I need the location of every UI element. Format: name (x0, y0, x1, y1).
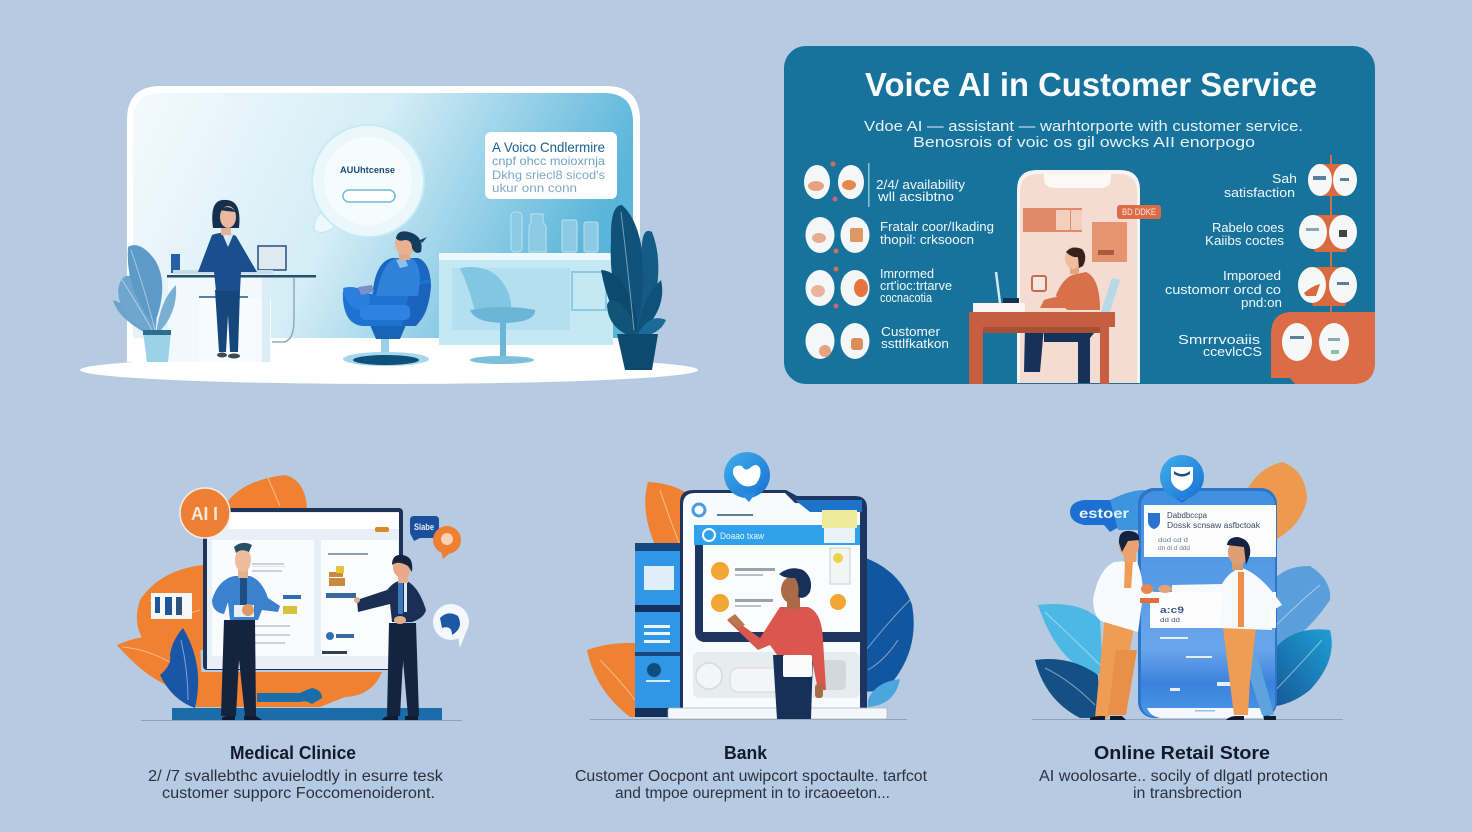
callout: voice assistant text: A Voico Cndlermire (492, 139, 605, 155)
orange tag (1117, 205, 1161, 219)
agent (1040, 247, 1100, 310)
benefit 7 label: Imporoed (1223, 269, 1281, 283)
benefit 2 label: Fratalr coor/Ikading (880, 220, 994, 234)
top card: dn di d ddd (1158, 546, 1190, 552)
benefit 3 label (880, 267, 952, 305)
tablet top logo (693, 504, 705, 516)
small data card (151, 593, 192, 619)
benefit 1 label (868, 163, 966, 207)
middle card: dd dd (1160, 618, 1180, 624)
benefits list: left icons and labels (804, 162, 994, 359)
phone banner (1023, 208, 1082, 232)
phone card (1092, 222, 1127, 262)
phone notch (1044, 173, 1111, 188)
light blue chair (460, 267, 535, 364)
room back wall (133, 93, 633, 345)
panel: Medical Clinic scene (117, 475, 469, 802)
smartphone (1138, 488, 1277, 718)
woman at kiosk (727, 568, 826, 719)
wooden desk (969, 312, 1115, 384)
chat bubbles (410, 516, 469, 648)
benefit 1 label: 2/4/ availability (876, 178, 966, 192)
man in navy suit (354, 555, 426, 720)
speech bubble: assistant (312, 125, 424, 237)
orange leaves (117, 475, 382, 707)
benefit 5 label (1224, 172, 1297, 200)
ground line (141, 720, 462, 721)
orange leaves (587, 482, 685, 717)
panel: Online Retail Store scene (1032, 455, 1343, 802)
benefits list: right icons and labels (1165, 155, 1375, 384)
middle card (1150, 592, 1276, 628)
benefit 6 icons (1299, 215, 1357, 252)
monitor (203, 508, 403, 670)
agent chair (1100, 278, 1120, 318)
ground line (590, 719, 907, 720)
room frame (127, 86, 640, 362)
benefit 6 label: Rabelo coes (1212, 221, 1284, 235)
benefit 1 label: wll acsibtno (877, 190, 954, 204)
orange corner block (1271, 312, 1375, 384)
benefit 2 icons (806, 217, 870, 254)
blue armchair (343, 258, 431, 366)
benefit 3 label: Imrormed (880, 267, 934, 281)
benefit 7 label (1165, 269, 1282, 310)
standing agent (198, 200, 257, 358)
chat bubbles: Slabe (414, 522, 434, 532)
heading: Bank: Bank (724, 742, 768, 763)
benefit 1 icons (804, 162, 864, 202)
shield pin icon (1160, 455, 1204, 503)
middle card: a:c9 (1160, 605, 1184, 615)
screen (695, 545, 865, 642)
panel: reception scene illustration (80, 86, 698, 384)
laptop (973, 272, 1046, 312)
benefit 6 label: Kaiibs coctes (1205, 234, 1284, 248)
phone with agent at desk (969, 170, 1161, 384)
benefit 3 icons (806, 266, 870, 308)
man left (1090, 531, 1159, 720)
bottom bar (1147, 708, 1263, 718)
benefit 3 label: cocnacotia (880, 291, 932, 305)
description: and tmpoe ourepment in to ircaoeeton... (615, 785, 890, 802)
benefit 6 label (1205, 221, 1284, 248)
bubble icon (724, 452, 770, 502)
benefit 5 icons (1308, 164, 1357, 196)
benefit 4 icons (806, 323, 870, 359)
reception desk (167, 246, 316, 362)
back shelf bottles (511, 212, 598, 252)
benefit 3 label: crt'ioc:trtarve (880, 279, 952, 293)
description (148, 768, 443, 802)
blue leaf (160, 628, 198, 708)
ground line (1032, 719, 1343, 720)
subtitle: Vdoe AI — assistant — warhtorporte with customer service. (864, 118, 1303, 135)
panel: Bank scene (575, 452, 928, 802)
sticky note (822, 510, 857, 543)
benefit 2 label: thopil: crksoocn (880, 233, 974, 247)
side device stack (635, 543, 680, 717)
base (668, 708, 887, 719)
benefit 8 icons (1282, 323, 1349, 361)
speech bubble: store (1070, 490, 1145, 532)
description (575, 768, 928, 802)
blue header bar (694, 525, 860, 545)
panel: Voice AI in Customer Service (784, 46, 1375, 384)
lower control panel (693, 652, 860, 698)
connector line (1330, 155, 1332, 335)
floor ellipse (80, 356, 698, 384)
background leaves (1035, 462, 1332, 718)
base gadget (257, 688, 322, 704)
subtitle (864, 118, 1303, 151)
top card: Dossk scnsaw asfbctoak (1167, 521, 1261, 530)
description (1039, 768, 1328, 802)
callout: voice assistant text: Dkhg sriecl8 sicod's (492, 168, 605, 182)
benefit 4 label: ssttlfkatkon (881, 337, 949, 351)
benefit 7 icons (1298, 267, 1357, 306)
floor strip (133, 338, 633, 366)
description: AI woolosarte.. socily of dlgatl protection (1039, 768, 1328, 785)
blue base bar (172, 708, 442, 720)
speech bubble: assistant: AUUhtcense (340, 165, 395, 176)
benefit 8 label: ccevlcCS (1203, 345, 1262, 359)
tablet kiosk (668, 490, 887, 719)
potted plant right (601, 205, 666, 370)
potted plant left (113, 245, 176, 362)
seated customer (358, 231, 427, 296)
callout: voice assistant text: ukur onn conn (492, 181, 577, 195)
benefit 7 label: customorr orcd co (1165, 283, 1281, 297)
top card: dod cd d (1158, 538, 1188, 544)
benefit 4 label (881, 325, 949, 351)
top card (1144, 505, 1276, 557)
benefit 8 label (1178, 333, 1262, 359)
benefit 8 label: Smrrrvoaiis (1178, 333, 1260, 347)
blue header bar: Doaao txaw (720, 531, 764, 542)
blue leaf (862, 557, 914, 707)
subtitle: Benosrois of voic os gil owcks AII enorpogo (913, 134, 1255, 151)
man right (1158, 537, 1282, 720)
badge: AI: AI I (191, 504, 218, 524)
man in light blue shirt (212, 543, 280, 720)
description: in transbrection (1133, 785, 1242, 802)
callout: voice assistant text: cnpf ohcc moioxrnja (492, 154, 605, 168)
description: 2/ /7 svallebthc avuielodtly in esurre tesk (148, 768, 443, 785)
description: customer supporc Foccomenoideront. (162, 785, 435, 802)
phone body (1017, 170, 1140, 383)
badge: AI (180, 488, 230, 538)
benefit 2 label (880, 220, 994, 247)
description: Customer Oocpont ant uwipcort spoctaulte. tarfcot (575, 768, 928, 785)
top card: Dabdbccpa (1167, 511, 1208, 520)
reception counter (439, 253, 613, 345)
benefit 7 label: pnd:on (1241, 296, 1282, 310)
heading: Online Retail Store: Online Retail Store (1094, 742, 1270, 763)
benefit 5 label: Sah (1272, 172, 1297, 186)
callout: voice assistant text (485, 132, 617, 199)
speech bubble: store: estoer (1079, 505, 1130, 521)
panel background (784, 46, 1375, 384)
orange tag: BD DDKE (1122, 207, 1156, 217)
benefit 4 label: Customer (881, 325, 940, 339)
benefit 5 label: satisfaction (1224, 186, 1295, 200)
title: Voice AI in Customer Service (865, 66, 1317, 103)
heading: Medical Clinice: Medical Clinice (230, 742, 356, 763)
